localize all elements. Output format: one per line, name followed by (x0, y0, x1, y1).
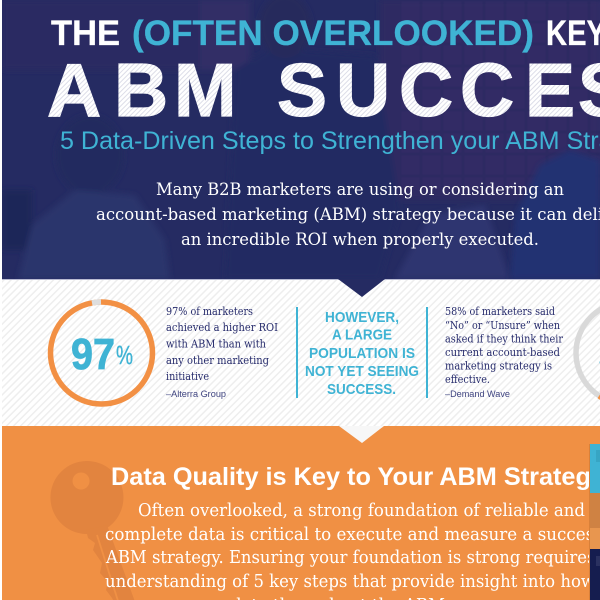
callout: however: POPULATION IS (309, 345, 415, 362)
callout: however: A LARGE (332, 326, 392, 344)
stat text: 97 percent (166, 305, 278, 399)
title line one: THE (51, 14, 120, 53)
arrow: stats pointer (339, 426, 384, 443)
stat text: 58 percent: asked if they think their (445, 332, 564, 346)
stat text: 58 percent: current account-based (445, 346, 560, 359)
hero background photo (2, 0, 600, 279)
stat text: 97 percent: initiative (166, 370, 209, 383)
title line one: (OFTEN OVERLOOKED) (132, 14, 534, 53)
stat text: 58 percent: –Demand Wave (445, 389, 510, 399)
stat text: 97 percent: with ABM than with (166, 338, 266, 350)
divider left (296, 307, 298, 398)
panel: data quality section (2, 426, 600, 600)
stat text: 97 percent: –Alterra Group (166, 389, 226, 399)
section body text (105, 500, 600, 600)
callout: however: SUCCESS. (327, 381, 396, 398)
stat text: 97 percent: any other marketing (166, 354, 269, 367)
panel: side navigation preview (589, 444, 600, 600)
divider right (426, 307, 428, 398)
intro text: Many B2B marketers are using or considering an (156, 180, 564, 199)
stat text: 58 percent: 58% of marketers said (445, 305, 555, 318)
donut chart: 97 percent (50, 302, 152, 404)
stat text: 97 percent: 97% of marketers (166, 305, 253, 318)
section heading: Data Quality is Key to Your ABM Strategy (111, 463, 600, 491)
panel: hero header (2, 0, 600, 279)
stat text: 58 percent: effective. (445, 373, 490, 386)
stat text: 58 percent (445, 305, 564, 399)
intro text (96, 180, 600, 249)
icon: key (50, 461, 138, 600)
donut chart: 97 percent: 97 (71, 330, 115, 379)
callout: however: NOT YET SEEING (305, 363, 419, 380)
callout: however: HOWEVER, (325, 309, 399, 326)
panel: statistics band (2, 279, 600, 426)
arrow: hero pointer (338, 279, 385, 297)
donut chart: 97 percent: % (116, 340, 133, 370)
stat text: 58 percent: “No” or “Unsure” when (445, 319, 560, 332)
callout: however (305, 309, 419, 398)
stat text: 58 percent: marketing strategy is (445, 360, 552, 372)
intro text: an incredible ROI when properly executed. (181, 230, 539, 249)
donut chart: 58 percent (576, 302, 600, 404)
stat text: 97 percent: achieved a higher ROI (166, 321, 278, 334)
